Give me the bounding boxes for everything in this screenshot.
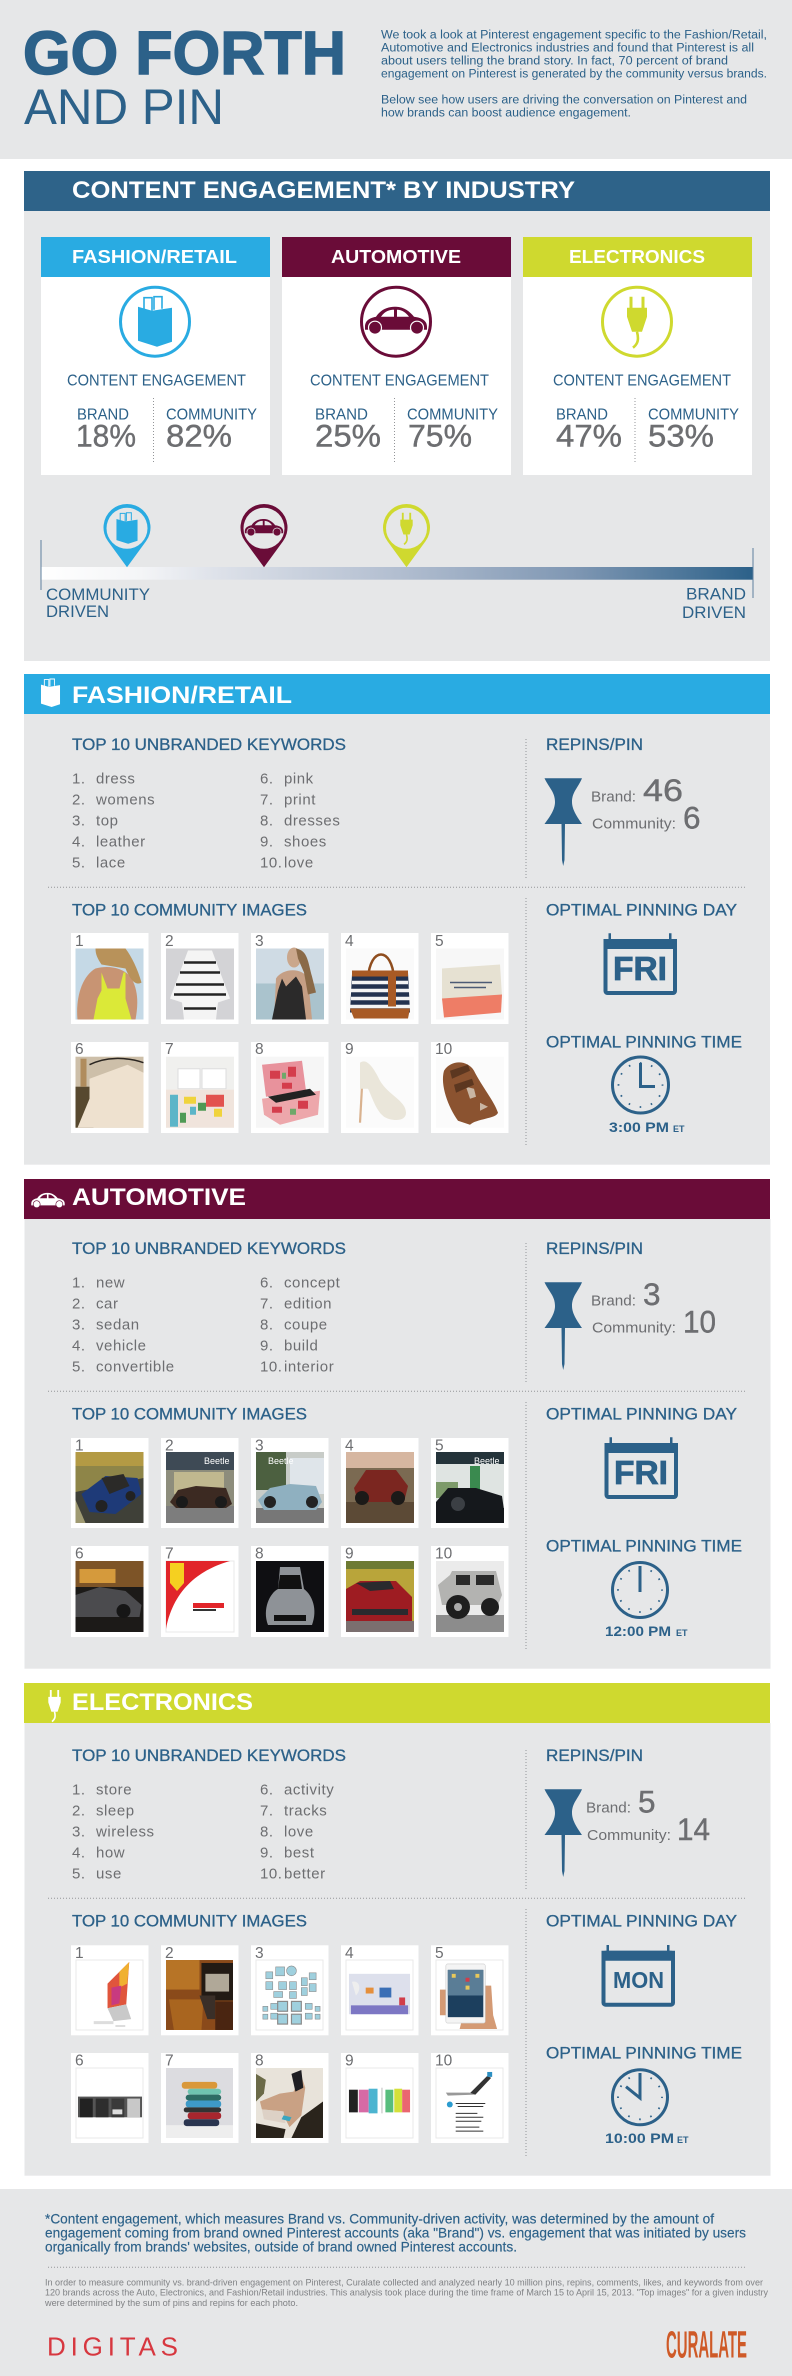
card: electronics: ELECTRONICS <box>569 247 705 267</box>
keyword list: 3. <box>72 812 86 829</box>
card: electronics <box>523 237 752 475</box>
card: electronics: BRAND <box>556 406 608 423</box>
keyword list: leather <box>96 833 146 850</box>
heading: automotive: AUTOMOTIVE <box>72 1184 246 1211</box>
keyword list: 3. <box>72 1823 86 1840</box>
card: automotive: 25% <box>315 418 381 454</box>
keyword list: activity <box>284 1781 334 1798</box>
image 2: 2 <box>165 933 174 950</box>
intro text: how brands can boost audience engagement. <box>381 107 631 119</box>
repins numbers: Brand: <box>586 1800 631 1817</box>
footnote: engagement coming from brand owned Pinterest accounts (aka "Brand") vs. engagement that was initiated by users <box>45 2224 746 2240</box>
keyword list: convertible <box>96 1359 175 1376</box>
image 1: 1 <box>75 933 84 950</box>
image 1: 1 <box>75 1438 84 1454</box>
keyword list: womens <box>95 791 155 808</box>
image 4 <box>341 933 418 1024</box>
header panel <box>0 0 792 159</box>
keyword list <box>72 1275 341 1376</box>
footnote: organically from brands' websites, outside of brand owned Pinterest accounts. <box>45 2238 517 2254</box>
repins numbers: 6 <box>683 800 701 836</box>
panel: content engagement by industry <box>24 171 770 661</box>
card: automotive <box>282 237 511 475</box>
scale: community to brand driven: BRAND <box>686 584 746 603</box>
keywords heading: TOP 10 UNBRANDED KEYWORDS <box>72 1746 346 1765</box>
keyword list: pink <box>284 770 314 787</box>
repins numbers: 5 <box>638 1783 656 1819</box>
image 10 <box>431 2052 508 2143</box>
keyword list: 1. <box>72 1781 86 1798</box>
card: fashion/retail: COMMUNITY <box>166 406 257 423</box>
image 8 <box>251 1546 328 1637</box>
image 5 <box>431 1438 508 1528</box>
keyword list: car <box>96 1296 118 1313</box>
repins numbers: 46 <box>643 772 683 808</box>
image 6 <box>71 1041 148 1133</box>
scale: community to brand driven: COMMUNITY <box>46 585 150 604</box>
repins numbers <box>591 772 701 836</box>
keyword list: 9. <box>260 833 274 850</box>
keyword list: 8. <box>260 1823 274 1840</box>
map pin: fashion <box>104 504 150 567</box>
keyword list: store <box>96 1781 132 1798</box>
keyword list: 1. <box>72 1275 86 1292</box>
keyword list: 2. <box>72 791 86 808</box>
image 7: 7 <box>165 1546 174 1562</box>
keyword list: 2. <box>72 1296 86 1313</box>
image 2: 2 <box>165 1945 174 1962</box>
methodology text: were determined by the sum of pins and repins for each photo. <box>44 2298 298 2308</box>
keyword list: 4. <box>72 833 86 850</box>
scale: community to brand driven: DRIVEN <box>682 603 746 622</box>
repins heading: REPINS/PIN <box>546 1239 643 1258</box>
keyword list <box>72 770 340 871</box>
time label: 10:00 PM <box>605 2130 674 2146</box>
image 6 <box>71 1546 148 1637</box>
icon: clock 3:00 <box>612 1057 668 1113</box>
keyword list: how <box>96 1844 125 1861</box>
title: go forth: GO FORTH <box>23 19 346 87</box>
intro text: engagement on Pinterest is generated by the community versus brands. <box>381 68 767 80</box>
keyword list: 3. <box>72 1317 86 1334</box>
scale: community to brand driven: DRIVEN <box>46 602 109 621</box>
intro text: We took a look at Pinterest engagement specific to the Fashion/Retail, <box>381 29 767 41</box>
image 5: 5 <box>435 1438 444 1454</box>
heading: electronics: ELECTRONICS <box>72 1689 253 1716</box>
card: automotive: CONTENT ENGAGEMENT <box>310 372 490 389</box>
section: automotive <box>24 1179 770 1669</box>
keyword list: 6. <box>260 770 274 787</box>
time label: ET <box>677 2135 689 2145</box>
image 8 <box>251 2052 328 2143</box>
keyword list: new <box>96 1275 125 1292</box>
day heading: OPTIMAL PINNING DAY <box>546 900 737 919</box>
repins heading: REPINS/PIN <box>546 1746 643 1765</box>
keyword list: love <box>284 1823 314 1840</box>
keyword list: 10. <box>260 854 283 871</box>
repins numbers: 14 <box>677 1811 710 1847</box>
image 3: 3 <box>255 1945 264 1962</box>
keyword list: 8. <box>260 812 274 829</box>
image 3: 3 <box>255 1438 264 1454</box>
scale: community to brand driven <box>41 540 753 622</box>
icon: push pin <box>544 1282 582 1370</box>
card: electronics: COMMUNITY <box>648 406 739 423</box>
keyword list: sedan <box>96 1317 140 1334</box>
keyword list: 9. <box>260 1844 274 1861</box>
image 7 <box>161 2052 238 2143</box>
icon: calendar fri: FRI <box>613 950 667 987</box>
logo: digitas: DIGITAS <box>47 2331 178 2361</box>
keyword list: tracks <box>284 1802 327 1819</box>
map pin: electronics <box>383 504 430 567</box>
image 9 <box>341 1546 418 1637</box>
image 7: 7 <box>165 2052 174 2070</box>
keyword list: 8. <box>260 1317 274 1334</box>
keyword list: vehicle <box>96 1338 147 1355</box>
image 10 <box>431 1041 508 1133</box>
images heading: TOP 10 COMMUNITY IMAGES <box>72 1404 307 1423</box>
keyword list: 6. <box>260 1781 274 1798</box>
keyword list: 9. <box>260 1338 274 1355</box>
keyword list: 10. <box>260 1865 283 1882</box>
footnote: *Content engagement, which measures Brand vs. Community-driven activity, was determined by the amount of <box>45 2210 714 2226</box>
image 2: 2 <box>165 1438 174 1454</box>
image 10: 10 <box>435 1041 453 1058</box>
repins numbers: 10 <box>683 1304 716 1340</box>
card: electronics: 47% <box>556 418 622 454</box>
keyword list: 10. <box>260 1359 283 1376</box>
image 9: 9 <box>345 1546 354 1562</box>
keyword list: 7. <box>260 1802 274 1819</box>
image 9 <box>341 2052 418 2143</box>
heading: fashion/retail: FASHION/RETAIL <box>72 682 292 709</box>
time heading: OPTIMAL PINNING TIME <box>546 1536 742 1555</box>
intro text: Automotive and Electronics industries and found that Pinterest is all <box>381 42 754 54</box>
card: automotive: BRAND <box>315 406 368 423</box>
keyword list: 7. <box>260 791 274 808</box>
image 2: Beetle <box>204 1456 230 1466</box>
icon: car <box>31 1193 65 1208</box>
methodology text: In order to measure community vs. brand-driven engagement on Pinterest, Curalate collected and analyzed nearly 10 million pins, repins, comments, likes, and keywords from over <box>45 2278 763 2288</box>
keyword list: 2. <box>72 1802 86 1819</box>
image 9: 9 <box>345 1041 354 1058</box>
image 9: 9 <box>345 2052 354 2070</box>
keyword list: best <box>284 1844 315 1861</box>
image 3 <box>251 1438 328 1528</box>
icon: calendar fri <box>604 933 677 993</box>
image 7 <box>161 1546 238 1637</box>
keyword list: print <box>284 791 316 808</box>
image 10 <box>431 1546 508 1637</box>
card: automotive: 75% <box>408 418 472 454</box>
card: fashion/retail <box>41 237 270 475</box>
image 6: 6 <box>75 2052 84 2070</box>
image 10: 10 <box>435 1546 453 1562</box>
keyword list: wireless <box>95 1823 155 1840</box>
title: and pin: AND PIN <box>24 79 224 135</box>
images heading: TOP 10 COMMUNITY IMAGES <box>72 900 307 919</box>
keyword list: top <box>96 812 119 829</box>
time heading: OPTIMAL PINNING TIME <box>546 2043 742 2062</box>
card: fashion/retail: FASHION/RETAIL <box>72 247 237 267</box>
keyword list: sleep <box>96 1802 135 1819</box>
image 5 <box>431 1945 508 2035</box>
keyword list: edition <box>284 1296 332 1313</box>
keyword list <box>72 1781 334 1882</box>
time label: ET <box>676 1628 688 1638</box>
image 3: 3 <box>255 933 264 950</box>
repins numbers <box>591 1276 716 1340</box>
image 3 <box>251 1945 328 2035</box>
keyword list: use <box>96 1865 122 1882</box>
image 1: 1 <box>75 1945 84 1962</box>
card: electronics: CONTENT ENGAGEMENT <box>553 372 731 389</box>
time label: 3:00 PM <box>609 1119 669 1135</box>
image 8: 8 <box>255 1041 264 1058</box>
icon: clock 12:00 <box>612 1562 668 1618</box>
repins numbers <box>586 1783 710 1847</box>
keyword list: 5. <box>72 854 86 871</box>
repins numbers: Brand: <box>591 789 636 806</box>
image 8: 8 <box>255 1546 264 1562</box>
card: electronics: 53% <box>648 418 714 454</box>
image 6: 6 <box>75 1041 84 1058</box>
day heading: OPTIMAL PINNING DAY <box>546 1404 737 1423</box>
keywords heading: TOP 10 UNBRANDED KEYWORDS <box>72 1239 346 1258</box>
icon: calendar fri: FRI <box>614 1454 668 1491</box>
image 4 <box>341 1945 418 2035</box>
image 4: 4 <box>345 1438 354 1454</box>
section: electronics <box>24 1683 770 2176</box>
footer panel <box>0 2189 792 2376</box>
image 2 <box>161 1945 238 2035</box>
image 5: 5 <box>435 1945 444 1962</box>
icon: push pin <box>544 1789 582 1877</box>
keyword list: dress <box>96 770 135 787</box>
image 10: 10 <box>435 2052 453 2070</box>
image 5: Beetle <box>474 1456 500 1466</box>
image 2 <box>161 1438 238 1528</box>
keyword list: dresses <box>284 812 340 829</box>
image 6 <box>71 2052 148 2143</box>
image 7 <box>161 1041 238 1133</box>
repins numbers: 3 <box>643 1276 661 1312</box>
image 5: 5 <box>435 933 444 950</box>
map pin: automotive <box>240 504 288 567</box>
image 5 <box>431 933 508 1024</box>
card: fashion/retail: BRAND <box>77 406 129 423</box>
time label <box>609 1119 685 1135</box>
image 3: Beetle <box>268 1456 294 1466</box>
time label: ET <box>673 1124 685 1134</box>
image 8: 8 <box>255 2052 264 2070</box>
keyword list: 4. <box>72 1338 86 1355</box>
keywords heading: TOP 10 UNBRANDED KEYWORDS <box>72 735 346 754</box>
time heading: OPTIMAL PINNING TIME <box>546 1032 742 1051</box>
card: fashion/retail: 82% <box>166 418 232 454</box>
methodology text <box>44 2278 768 2308</box>
image 1 <box>71 1438 148 1528</box>
keyword list: better <box>284 1865 326 1882</box>
image 1 <box>71 933 148 1024</box>
image 4: 4 <box>345 933 354 950</box>
keyword list: 1. <box>72 770 86 787</box>
card: fashion/retail: 18% <box>76 418 136 454</box>
day heading: OPTIMAL PINNING DAY <box>546 1911 737 1930</box>
intro text: Below see how users are driving the conversation on Pinterest and <box>381 94 747 106</box>
keyword list: 5. <box>72 1865 86 1882</box>
image 6: 6 <box>75 1546 84 1562</box>
image 7: 7 <box>165 1041 174 1058</box>
icon: calendar mon <box>602 1945 675 2005</box>
image 2 <box>161 933 238 1024</box>
footnote <box>45 2210 746 2254</box>
keyword list: lace <box>96 854 126 871</box>
icon: push pin <box>544 778 582 866</box>
section: fashion/retail <box>24 674 770 1165</box>
intro text: about users telling the brand story. In fact, 70 percent of brand <box>381 55 728 67</box>
icon: calendar mon: MON <box>613 1967 664 1993</box>
repins numbers: Community: <box>587 1827 671 1844</box>
card: automotive: AUTOMOTIVE <box>331 247 461 267</box>
repins numbers: Community: <box>592 1320 676 1337</box>
image 3 <box>251 933 328 1024</box>
repins numbers: Brand: <box>591 1293 636 1310</box>
repins heading: REPINS/PIN <box>546 735 643 754</box>
repins numbers: Community: <box>592 816 676 833</box>
card: fashion/retail: CONTENT ENGAGEMENT <box>67 372 247 389</box>
icon: plug <box>48 1690 61 1722</box>
time label: 12:00 PM <box>605 1623 671 1639</box>
keyword list: concept <box>284 1275 341 1292</box>
keyword list: coupe <box>284 1317 328 1334</box>
methodology text: 120 brands across the Auto, Electronics, and Fashion/Retail industries. This analysis took place during the time frame of March 15 to April 15, 2013. "Top images" for a given industry <box>45 2288 768 2298</box>
image 8 <box>251 1041 328 1133</box>
keyword list: interior <box>284 1359 334 1376</box>
keyword list: 6. <box>260 1275 274 1292</box>
image 4 <box>341 1438 418 1528</box>
card: automotive: COMMUNITY <box>407 406 498 423</box>
image 9 <box>341 1041 418 1133</box>
keyword list: love <box>284 854 314 871</box>
keyword list: 4. <box>72 1844 86 1861</box>
icon: clock 10:00 <box>612 2070 668 2125</box>
image 1 <box>71 1945 148 2035</box>
heading: content engagement: CONTENT ENGAGEMENT* BY INDUSTRY <box>72 177 575 204</box>
keyword list: 5. <box>72 1359 86 1376</box>
images heading: TOP 10 COMMUNITY IMAGES <box>72 1911 307 1930</box>
intro text <box>381 29 767 119</box>
icon: calendar fri <box>604 1437 678 1497</box>
keyword list: shoes <box>284 833 327 850</box>
image 4: 4 <box>345 1945 354 1962</box>
keyword list: 7. <box>260 1296 274 1313</box>
icon: bag <box>41 679 60 707</box>
keyword list: build <box>284 1338 318 1355</box>
